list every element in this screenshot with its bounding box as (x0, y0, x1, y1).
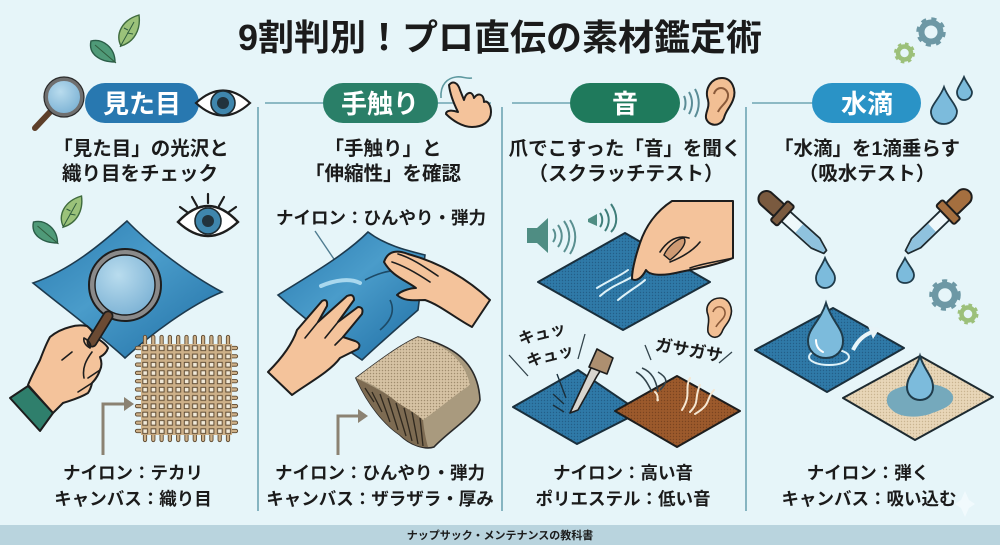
icon: leaves top (91, 15, 139, 63)
arrowhead (358, 409, 368, 423)
panel: water check (752, 77, 993, 509)
header pill: 音: 音 (612, 89, 638, 119)
result text: ナイロン：弾く (807, 463, 929, 483)
subheading (509, 138, 741, 185)
icon: eye (178, 194, 238, 236)
panel: sound check (509, 78, 741, 509)
subheading (53, 138, 229, 185)
result text (782, 463, 956, 509)
icon: gears (931, 281, 977, 323)
panel: visual check (10, 77, 250, 509)
illustration: fabric scratched (538, 233, 710, 330)
illustration: polyester sample (615, 368, 740, 447)
arrow: to canvas (103, 404, 128, 455)
illustration: nylon cloth (278, 232, 425, 360)
subheading (774, 138, 960, 185)
result text: ポリエステル：低い音 (536, 489, 710, 509)
result text: キャンバス：ザラザラ・厚み (266, 489, 494, 509)
illustration: scratching hand (632, 201, 733, 280)
arrowhead (124, 397, 134, 411)
illustration: canvas absorbs water (843, 356, 993, 440)
result text (266, 463, 494, 509)
result text (536, 463, 710, 509)
footer bar: ナップサック・メンテナンスの教科書 (407, 528, 593, 542)
header pill: 手触り (323, 83, 438, 123)
result text: ナイロン：ひんやり・弾力 (275, 463, 485, 483)
result text: キャンバス：織り目 (54, 489, 212, 509)
subheading: 爪でこすった「音」を聞く (509, 138, 741, 160)
illustration: nylon repels water (755, 303, 904, 392)
icon: falling drops (816, 258, 914, 288)
header pill: 音 (570, 83, 680, 123)
icon: gears top (896, 19, 944, 62)
illustration: dropper right (898, 182, 978, 261)
subheading: 「伸縮性」を確認 (305, 163, 461, 185)
icon: speaker large (527, 218, 575, 254)
illustration: nylon sample (513, 370, 640, 444)
sound word: ガサガサ: ガサガサ (654, 335, 724, 366)
icon: ear header (684, 78, 734, 125)
icon: pointing hand (441, 77, 491, 127)
subheading: 織り目をチェック (62, 163, 218, 185)
sound word: キュッ キュッ: キュッ (525, 342, 576, 371)
icon: eye header (196, 90, 250, 116)
illustration: canvas burlap (356, 337, 480, 448)
label: ナイロン：ひんやり・弾力 (276, 208, 486, 228)
icon: leaves (33, 196, 82, 244)
subheading (305, 138, 461, 185)
icon: speaker small (588, 204, 616, 232)
sound word: キュッ キュッ: キュッ (517, 320, 568, 349)
dividers (258, 103, 812, 511)
subheading: （吸水テスト） (799, 163, 935, 185)
result text (54, 463, 212, 509)
subheading: 「水滴」を1滴垂らす (774, 138, 960, 160)
subheading: 「見た目」の光沢と (53, 138, 229, 160)
watermark sparkle (955, 491, 975, 517)
illustration: magnifier and hand (10, 249, 161, 431)
title: 9割判別！プロ直伝の素材鑑定術 (238, 17, 762, 58)
illustration: nylon cloth (33, 221, 222, 358)
illustration: right hand (384, 252, 490, 327)
footer bar (0, 525, 1000, 545)
header pill: 見た目 (85, 83, 199, 123)
illustration: knife (553, 349, 613, 413)
icon: water drops header (931, 77, 972, 124)
result text: ナイロン：テカリ (63, 463, 203, 483)
illustration: left hand (268, 295, 362, 395)
icon: ear (707, 298, 731, 337)
header pill: 見た目: 見た目 (103, 89, 181, 119)
header pill: 水滴: 水滴 (841, 89, 893, 119)
leader line (315, 231, 340, 268)
subheading: （スクラッチテスト） (528, 163, 724, 185)
header pill: 手触り: 手触り (341, 89, 419, 119)
illustration: dropper left (752, 184, 834, 262)
result text: ナイロン：高い音 (553, 463, 693, 483)
illustration: canvas weave swatch (137, 337, 236, 440)
result text: キャンバス：吸い込む (782, 489, 956, 509)
panel: touch check (266, 77, 494, 509)
icon: magnifier header (35, 77, 84, 128)
subheading: 「手触り」と (324, 138, 442, 160)
arrow: to canvas (338, 416, 360, 455)
header pill: 水滴 (812, 83, 921, 123)
sound word: キュッ キュッ (509, 320, 585, 376)
